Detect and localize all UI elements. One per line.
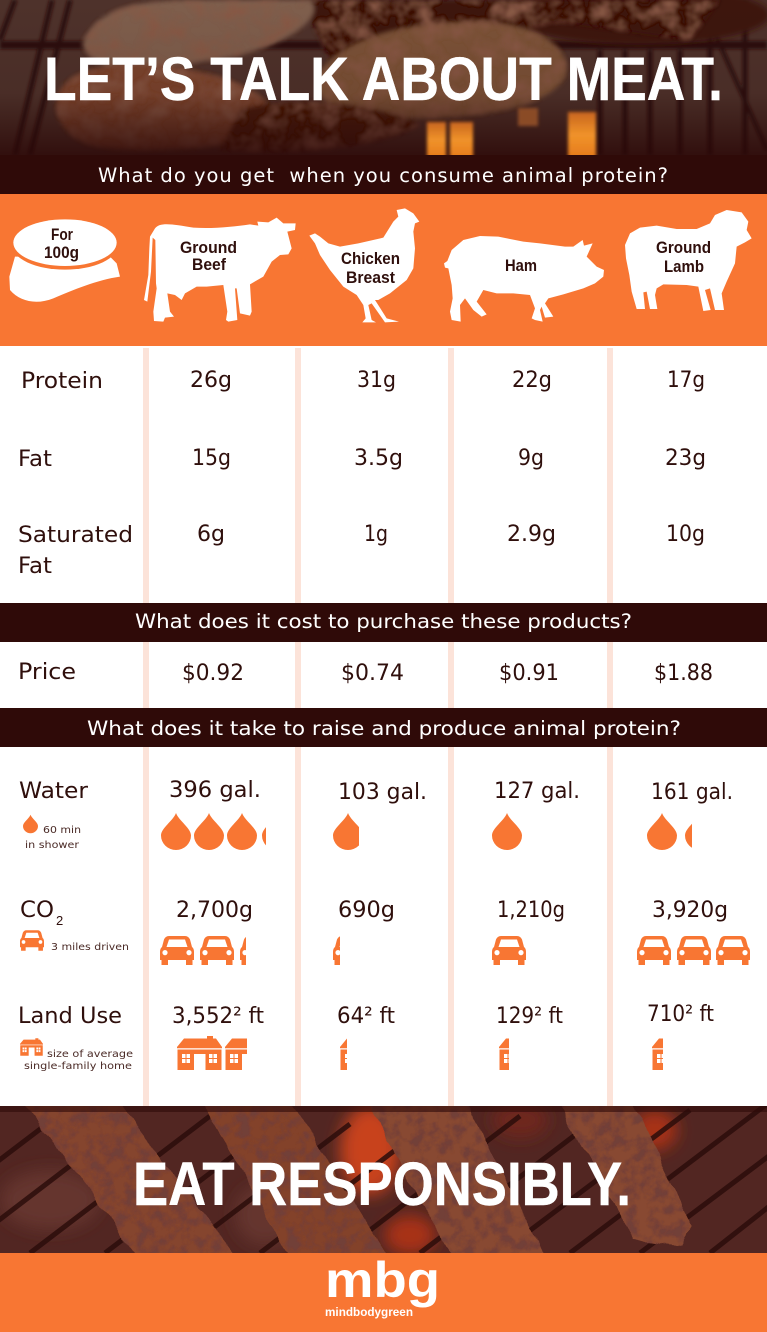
- row: water: 396 gal.: [169, 777, 261, 803]
- section bar: raise and produce: [0, 708, 767, 747]
- row: water: in shower: [25, 840, 80, 851]
- row: price: $0.91: [499, 660, 559, 686]
- row: fat: [18, 445, 706, 472]
- row: land use: Land Use: [18, 1003, 122, 1029]
- row: land use: [18, 1001, 714, 1072]
- icon: legend house: [20, 1038, 43, 1056]
- row: land use: size of average: [47, 1049, 133, 1060]
- row: CO2: 2: [56, 913, 63, 928]
- row: CO2: 2,700g: [176, 897, 253, 923]
- row: CO2: 690g: [338, 897, 395, 923]
- row: saturated fat: Saturated: [18, 522, 133, 548]
- row: CO2: 3 miles driven: [51, 942, 129, 953]
- icon: sheep silhouette with Ground Lamb: Ground: [656, 239, 711, 257]
- row: saturated fat: 6g: [197, 521, 225, 547]
- row: water: Water: [19, 778, 89, 804]
- row: protein: [21, 367, 705, 394]
- row: protein: 31g: [357, 367, 396, 393]
- logo: mindbodygreen: mindbodygreen: [325, 1305, 413, 1319]
- section bar: cost: [0, 603, 767, 642]
- row: fat: 23g: [665, 445, 706, 471]
- icon: portion bowl: [9, 219, 120, 302]
- header photo: meat on a grill: [0, 0, 767, 155]
- row: protein: 17g: [667, 367, 705, 393]
- row: saturated fat: 10g: [666, 521, 705, 547]
- icons: cars: [160, 936, 750, 965]
- icons: water drops: [161, 813, 715, 850]
- row: price: $0.92: [182, 660, 244, 686]
- row: land use: 64² ft: [337, 1003, 395, 1029]
- icon: sheep silhouette with Ground Lamb: [625, 210, 752, 311]
- icon: pig silhouette with Ham: [444, 236, 604, 322]
- row: CO2: CO: [20, 897, 54, 923]
- row: water: 161 gal.: [651, 779, 733, 805]
- row: CO2: [20, 897, 750, 965]
- row: CO2: 3,920g: [652, 897, 728, 923]
- icon: pig silhouette with Ham: Ham: [505, 257, 537, 275]
- panel: orange animal band: [0, 194, 767, 346]
- row: price: Price: [18, 659, 76, 685]
- icon: sheep silhouette with Ground Lamb: Lamb: [664, 258, 704, 276]
- row: land use: 129² ft: [496, 1003, 563, 1029]
- row: water: 127 gal.: [494, 778, 580, 804]
- row: protein: 26g: [190, 367, 232, 393]
- row: land use: 710² ft: [647, 1001, 714, 1027]
- section bar: animal protein: [0, 155, 767, 194]
- icon: portion bowl: 100g: [44, 244, 79, 262]
- row: fat: 3.5g: [354, 445, 403, 471]
- icon: chicken silhouette with Chicken Breast: Breast: [346, 269, 395, 287]
- row: protein: 22g: [512, 367, 552, 393]
- section bar: animal protein: What do you get when you consume animal protein?: [98, 164, 668, 187]
- icon: chicken silhouette with Chicken Breast: [309, 208, 419, 322]
- row: CO2: 1,210g: [497, 897, 565, 923]
- footer photo: sausages on a grill: [0, 1106, 767, 1253]
- footer band with mbg logo: [0, 1252, 767, 1332]
- row: land use: 3,552² ft: [172, 1003, 264, 1029]
- section bar: raise and produce: What does it take to raise and produce animal protein?: [87, 717, 681, 740]
- row: saturated fat: 1g: [364, 521, 388, 547]
- row: water: [19, 777, 733, 851]
- row: fat: 9g: [518, 445, 544, 471]
- closing headline: EAT RESPONSIBLY.: [133, 1150, 631, 1218]
- icon: portion bowl: For: [51, 226, 73, 244]
- icon: legend car: [20, 930, 44, 951]
- row: saturated fat: Fat: [18, 553, 52, 579]
- row: protein: Protein: [21, 368, 103, 394]
- row: water: 60 min: [43, 825, 81, 836]
- row: fat: Fat: [18, 446, 52, 472]
- icon: legend drop: [23, 815, 38, 833]
- icon: cow silhouette with Ground Beef: Ground: [180, 239, 237, 257]
- section bar: cost: What does it cost to purchase these products?: [135, 610, 632, 633]
- icon: chicken silhouette with Chicken Breast: Chicken: [341, 250, 400, 268]
- row: price: [18, 659, 713, 686]
- icons: houses: [177, 1036, 697, 1070]
- row: land use: single-family home: [24, 1061, 132, 1072]
- icon: cow silhouette with Ground Beef: Beef: [192, 256, 226, 274]
- row: saturated fat: [18, 521, 705, 579]
- row: fat: 15g: [192, 445, 231, 471]
- row: saturated fat: 2.9g: [507, 521, 556, 547]
- row: water: 103 gal.: [338, 779, 427, 805]
- row: price: $1.88: [654, 660, 713, 686]
- row: price: $0.74: [341, 660, 404, 686]
- logo: mindbodygreen: mbg: [325, 1252, 440, 1308]
- icon: cow silhouette with Ground Beef: [144, 218, 296, 322]
